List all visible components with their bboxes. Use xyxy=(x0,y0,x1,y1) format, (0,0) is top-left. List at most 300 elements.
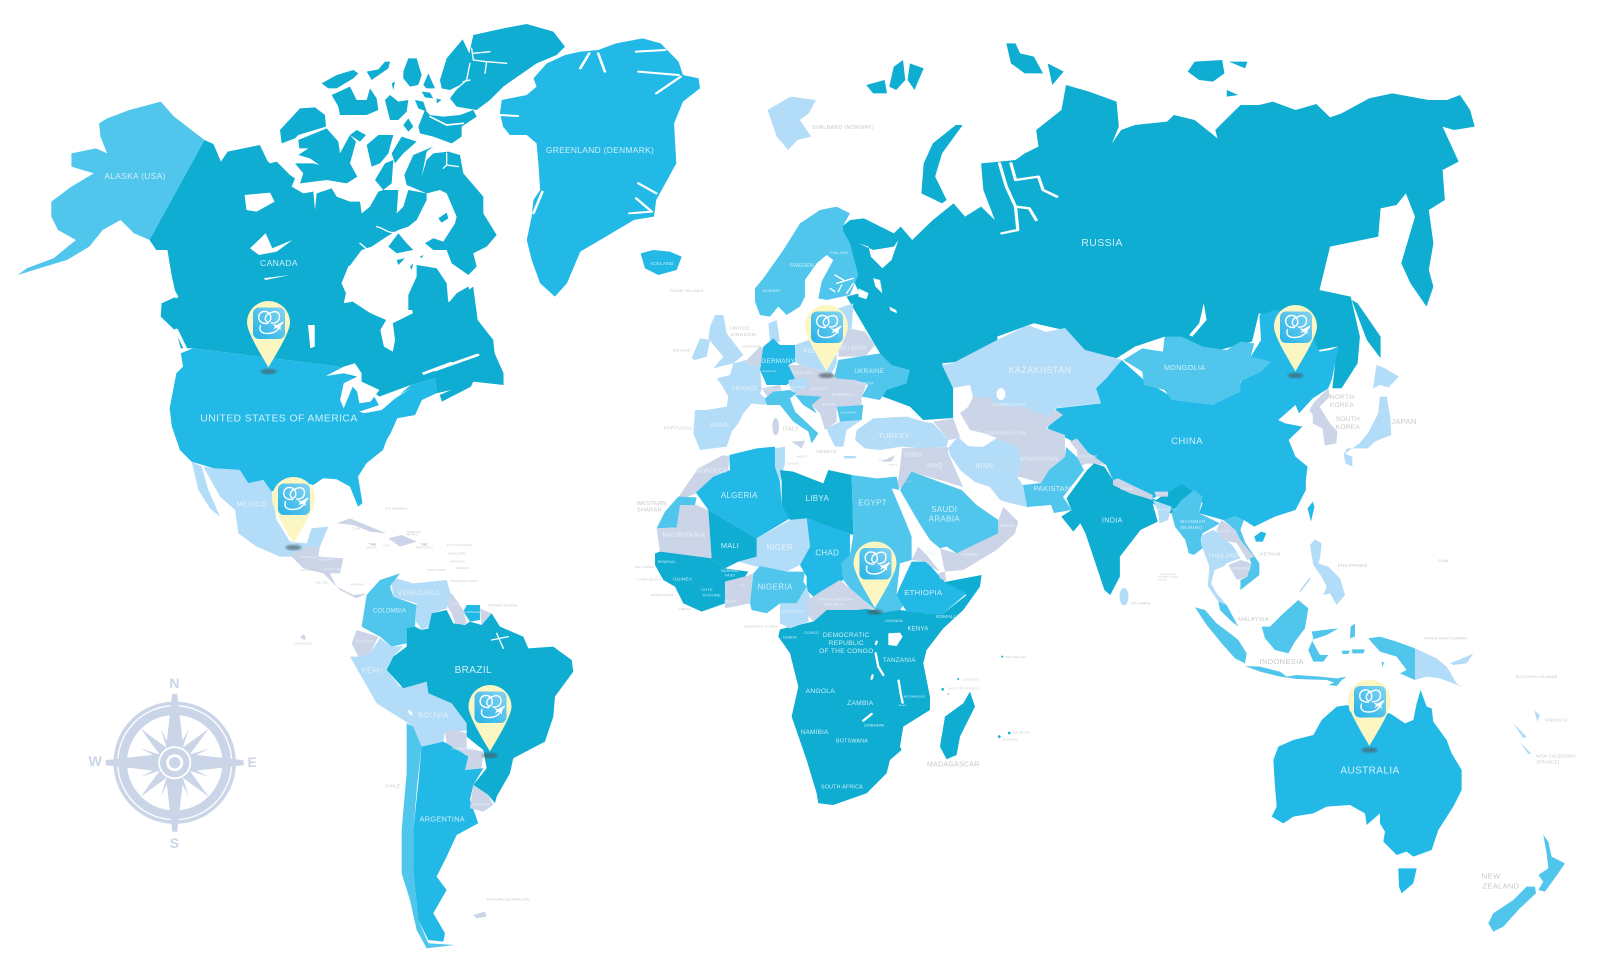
region: Africa and Arabia xyxy=(655,447,1018,805)
labels: North America, Russia, Oceania xyxy=(104,125,1576,890)
labels: Europe and Middle East: IRAN xyxy=(975,463,993,470)
region: Central Asia and Middle East north xyxy=(897,325,1122,513)
labels: Europe and Middle East: HUNGARY xyxy=(811,387,829,391)
Iran xyxy=(948,437,1027,507)
Paraguay xyxy=(445,729,483,770)
labels: Latin America: PUERTO RICO xyxy=(416,547,433,549)
region: Maritime Southeast Asia xyxy=(1195,539,1527,738)
Philippines xyxy=(1310,539,1345,605)
compass rose: E xyxy=(248,754,257,770)
labels: Africa: D'IVOIRE xyxy=(702,592,721,597)
labels: Africa: OMAN xyxy=(1000,523,1015,528)
pin: Brazil xyxy=(468,685,512,758)
Niger xyxy=(738,518,810,572)
Quebec north xyxy=(408,265,477,310)
Baffin Island xyxy=(404,147,497,275)
labels: North America, Russia, Oceania: NEW CALEDONIA xyxy=(1536,754,1576,758)
labels: Africa: ANGOLA xyxy=(806,688,835,695)
labels: Latin America: GUADELOUPE xyxy=(448,552,466,555)
labels: Latin America: VENEZUELA xyxy=(398,590,440,597)
labels: Asia: AFGHANISTAN xyxy=(1020,456,1058,462)
West Africa xyxy=(655,552,748,612)
Galapagos xyxy=(301,634,306,639)
Tunisia xyxy=(775,447,785,482)
Spencer Gulf xyxy=(1367,813,1385,833)
labels: North America, Russia, Oceania: UNITED STATES OF AMERICA xyxy=(200,414,358,424)
Canada north mainland xyxy=(237,153,427,310)
labels: Africa: SENEGAL xyxy=(658,560,676,564)
labels: Latin America: PARAGUAY xyxy=(452,746,475,751)
labels: Africa: UGANDA xyxy=(885,618,903,623)
French Guiana xyxy=(480,608,492,625)
labels: Latin America: ST KITTS AND NEVIS xyxy=(447,544,472,547)
labels: Europe and Middle East: FINLAND xyxy=(830,250,848,255)
labels: Asia: SOUTH xyxy=(1336,416,1360,423)
Sri Lanka xyxy=(1120,588,1128,605)
labels: Europe and Middle East: MOLDOVA xyxy=(856,382,874,386)
labels: Africa: NIGER xyxy=(766,543,793,552)
pin: Australia xyxy=(1348,680,1391,753)
labels: Asia: KASHMIR xyxy=(1079,455,1097,459)
Central and Balkan Europe xyxy=(788,365,867,430)
labels: Africa: NIGERIA xyxy=(757,582,793,591)
White Sea and Russian lakes xyxy=(858,163,1207,337)
labels: Asia: PAPUA NEW GUINEA xyxy=(1423,636,1467,640)
labels: Europe and Middle East: BULGARIA xyxy=(841,411,857,415)
Germany xyxy=(760,338,797,385)
labels: Latin America: COLOMBIA xyxy=(373,609,406,615)
labels: Africa: DEMOCRATIC xyxy=(823,632,870,639)
Baltic states xyxy=(833,303,853,333)
Nigeria xyxy=(750,566,807,613)
Malay isthmus xyxy=(1208,585,1227,605)
region: Central and Southern Europe xyxy=(692,303,960,462)
labels: Europe and Middle East: SYRIA xyxy=(904,453,923,459)
region: Quebec and Hudson islands xyxy=(388,233,477,310)
labels: North America, Russia, Oceania: AUSTRALIA xyxy=(1340,766,1400,776)
labels: Europe and Middle East: POLAND xyxy=(804,349,830,355)
Peru and Bolivia xyxy=(350,638,467,747)
labels: Africa: KENYA xyxy=(907,627,928,633)
labels: North America, Russia, Oceania: CANADA xyxy=(260,258,298,268)
India xyxy=(1061,463,1194,595)
labels: Africa: ZAMBIA xyxy=(847,700,874,707)
labels: Europe and Middle East: UZBEKISTAN xyxy=(993,402,1026,408)
labels: Africa: MALAWI xyxy=(899,704,907,707)
labels: Africa: REUNION xyxy=(1003,738,1017,742)
labels: Latin America: EL SALVADOR xyxy=(301,569,318,572)
labels: Europe and Middle East: MALTA xyxy=(797,454,807,458)
compass rose: S xyxy=(170,835,180,851)
Hudson Bay xyxy=(341,243,420,352)
Hainan xyxy=(1254,532,1266,542)
Franz Josef Land xyxy=(866,60,924,93)
pin: Mexico xyxy=(272,477,315,550)
labels: Asia: CHINA xyxy=(1171,436,1203,447)
labels: Africa: TANZANIA xyxy=(883,657,916,664)
labels: Africa: CHAD xyxy=(815,548,839,557)
labels: Europe and Middle East xyxy=(651,250,1027,483)
labels: Latin America: PANAMA xyxy=(351,583,364,587)
Ellesmere Island xyxy=(440,24,565,110)
labels: Africa: MOROCCO xyxy=(696,469,728,475)
Ghana and Togo xyxy=(725,573,753,608)
Mongolia xyxy=(1123,337,1271,405)
Laos xyxy=(1216,520,1254,560)
Saudi Arabia xyxy=(900,472,998,553)
labels: Europe and Middle East: LEBANON xyxy=(887,464,898,467)
labels: North America, Russia, Oceania: GREENLAND (DENMARK) xyxy=(546,145,654,155)
labels: North America, Russia, Oceania: ZEALAND xyxy=(1483,882,1520,890)
labels: Europe and Middle East: NORWAY xyxy=(762,288,781,293)
labels: Asia: SRI LANKA xyxy=(1131,602,1151,606)
labels: Africa: MOZAMBIQUE xyxy=(904,694,925,698)
labels: Africa: SAUDI xyxy=(931,505,957,514)
France xyxy=(717,360,767,413)
Iceland xyxy=(641,250,682,275)
Taiwan xyxy=(1308,502,1314,522)
labels: Europe and Middle East: CYPRUS xyxy=(879,461,889,463)
labels: Europe and Middle East: TURKEY xyxy=(878,431,910,440)
labels: Europe and Middle East: IRELAND xyxy=(672,347,691,352)
labels: Latin America: BRAZIL xyxy=(455,665,492,676)
labels: Africa: CENTRAL AFRICAN xyxy=(817,598,853,602)
labels: Europe and Middle East: AUSTRIA xyxy=(790,386,806,390)
labels: Europe and Middle East: GREECE xyxy=(816,449,837,454)
labels: Africa: FASO xyxy=(725,574,735,578)
labels: Africa: DJIBOUTI xyxy=(944,573,959,577)
Moluccas xyxy=(1342,623,1384,667)
region: Hudson Bay, USA, Greenland xyxy=(165,38,700,507)
Japan xyxy=(1343,365,1399,467)
compass rose: N xyxy=(169,675,180,691)
labels: Africa: CONGO xyxy=(804,631,819,635)
Pakistan xyxy=(1023,447,1084,513)
Australia xyxy=(1272,690,1462,857)
labels: Africa: SOUTH AFRICA xyxy=(821,785,863,791)
labels: North America, Russia, Oceania: KAZAKHSTAN xyxy=(1009,365,1071,375)
Bangladesh xyxy=(1153,500,1172,523)
Crete and Cyprus xyxy=(843,455,895,462)
labels: Latin America xyxy=(236,499,530,901)
Indian Ocean islands xyxy=(941,656,1011,738)
labels: Africa: GUINEA-BISSAU xyxy=(636,577,661,581)
labels: Latin America: GUYANA xyxy=(450,603,463,607)
Sulawesi xyxy=(1308,628,1338,662)
labels: Latin America: FRENCH GUIANA xyxy=(488,603,518,607)
labels: Latin America: URUGUAY xyxy=(472,803,490,807)
labels: Europe and Middle East: SWEDEN xyxy=(789,263,814,269)
labels: Africa: ARABIA xyxy=(929,514,960,523)
Southampton and small islands xyxy=(388,233,423,270)
labels: Asia: NICOBAR ISLANDS xyxy=(1158,576,1179,579)
labels: Africa: LIBYA xyxy=(805,494,829,503)
labels: Africa: YEMEN xyxy=(961,552,978,557)
Morocco xyxy=(678,455,729,497)
labels: North America, Russia, Oceania: SVALBARD (NORWAY) xyxy=(812,125,874,131)
labels: Asia: MALAYSIA xyxy=(1238,617,1269,623)
pin: South Sudan xyxy=(854,542,896,615)
labels: Europe and Middle East: SPAIN xyxy=(710,423,729,429)
labels: Europe and Middle East: TUNISIA xyxy=(786,461,799,465)
labels: Europe and Middle East: UKRAINE xyxy=(854,368,884,375)
Newfoundland xyxy=(473,353,504,383)
region: Northern Europe xyxy=(641,207,858,317)
labels: Europe and Middle East: TURKMENISTAN xyxy=(985,430,1027,436)
Central African Republic xyxy=(807,580,873,622)
Ukraine xyxy=(833,353,910,400)
Libya xyxy=(780,470,853,535)
labels: Africa: SHARAH xyxy=(637,508,662,514)
labels: Africa: BOTSWANA xyxy=(836,739,868,745)
labels: Europe and Middle East: JORDAN xyxy=(901,479,912,483)
Timor xyxy=(1328,678,1343,686)
labels: Asia: SOLOMON ISLANDS xyxy=(1515,674,1558,679)
New Zealand xyxy=(1488,835,1565,932)
Kashmir xyxy=(1070,438,1106,467)
Sicily and Sardinia xyxy=(772,418,805,448)
Mali xyxy=(708,510,757,568)
labels: Africa: WESTERN xyxy=(637,501,667,507)
New Britain xyxy=(1450,653,1473,665)
Malay Peninsula xyxy=(1218,602,1238,627)
Caucasus xyxy=(933,418,960,440)
Sumatra xyxy=(1195,607,1247,663)
Greenland xyxy=(500,38,700,297)
labels: Latin America: SAN JOSE xyxy=(316,582,328,585)
labels: Latin America: BOLIVIA xyxy=(418,710,449,719)
labels: Latin America: BARBADOS xyxy=(456,567,470,570)
labels: Asia: VIETNAM xyxy=(1259,552,1280,556)
labels: Africa: NAMIBIA xyxy=(801,729,829,736)
pin: Canada xyxy=(247,301,290,374)
labels: Asia: INDIA xyxy=(1102,516,1123,524)
labels: Latin America: JAMAICA xyxy=(366,546,377,549)
Greenland fjords xyxy=(500,50,681,213)
labels: Latin America: HONDURAS xyxy=(319,557,335,561)
Brazil xyxy=(387,610,573,803)
region: Alaska and Canada south, USA, Greenland xyxy=(18,102,504,402)
labels: Latin America: THE BAHAMAS xyxy=(385,506,407,510)
Bhutan xyxy=(1154,492,1168,497)
Guyana xyxy=(447,593,467,627)
Devon fjord xyxy=(430,117,463,125)
labels: Africa: MADAGASCAR xyxy=(927,761,980,768)
Baffin fjord xyxy=(360,153,458,252)
Solomon Islands xyxy=(1513,723,1527,738)
labels: Latin America: TRINIDAD AND TOBAGO xyxy=(450,580,478,583)
Djibouti xyxy=(938,572,947,582)
labels: Asia: (BURMA) xyxy=(1180,525,1202,531)
labels: Europe and Middle East: ITALY xyxy=(783,426,799,432)
Myanmar xyxy=(1172,490,1220,555)
Cameroon xyxy=(780,587,810,628)
labels: Europe and Middle East: CZECH REP. xyxy=(793,371,814,375)
labels: Africa: CAMEROON xyxy=(780,610,803,614)
labels: Asia: LAOS xyxy=(1217,529,1231,534)
labels: Africa: SOMALIA xyxy=(936,614,960,620)
Benelux xyxy=(745,347,765,367)
Turkey xyxy=(855,417,948,450)
Scandinavia and Finland xyxy=(755,207,858,317)
labels: Europe and Middle East: SERBIA xyxy=(822,403,836,407)
Algeria xyxy=(696,447,790,538)
Victoria Island xyxy=(295,128,357,183)
labels: Europe and Middle East: FAROE ISLANDS xyxy=(670,288,704,293)
labels: Asia: INDONESIA xyxy=(1260,657,1304,666)
labels: Asia: MYANMAR xyxy=(1180,519,1206,525)
Central Asia xyxy=(960,397,1065,483)
United States xyxy=(170,348,437,507)
Canada mainland xyxy=(150,140,504,402)
labels: Asia: PHILIPPINES xyxy=(1338,563,1367,568)
Indonesian Papua xyxy=(1368,637,1415,680)
labels: Europe and Middle East: NETHERLANDS xyxy=(742,346,761,349)
Canadian lakes and channels xyxy=(165,193,478,373)
Devon Island xyxy=(418,110,477,143)
Chad xyxy=(800,518,850,597)
labels: Africa: SIERRA LEONE xyxy=(650,593,674,597)
labels: Asia: CAMBODIA xyxy=(1229,567,1251,571)
labels: Europe and Middle East: GERMANY xyxy=(761,358,796,365)
labels: Latin America: MEXICO xyxy=(236,499,267,508)
labels: Latin America: GALAPAGOS xyxy=(295,641,312,645)
labels: Asia: KOREA xyxy=(1336,424,1360,431)
labels: Africa: ERITREA xyxy=(923,551,937,555)
labels: Europe and Middle East: PORTUGAL xyxy=(664,425,692,431)
labels: Africa: ALGERIA xyxy=(721,491,758,500)
labels: Latin America: GUATEMALA xyxy=(300,555,317,559)
labels: Africa: GABON xyxy=(783,636,797,640)
Suriname xyxy=(463,605,480,622)
Austria xyxy=(788,377,808,392)
Palawan xyxy=(1300,578,1310,592)
labels: Africa: MALI xyxy=(721,541,739,550)
African lakes xyxy=(863,633,903,721)
Baja California xyxy=(192,462,220,517)
Madagascar xyxy=(940,692,975,759)
labels: Asia: MONGOLIA xyxy=(1164,364,1205,372)
Big southern Africa group xyxy=(778,575,982,805)
compass rose xyxy=(89,675,257,851)
Uruguay xyxy=(470,785,493,812)
labels: Asia xyxy=(1020,364,1558,679)
Italy xyxy=(765,390,818,443)
Iraq, Syria, Jordan xyxy=(897,447,963,490)
region: Oceania xyxy=(1272,690,1565,932)
labels: Africa: THE GAMBIA xyxy=(634,565,654,569)
labels: Asia: PAKISTAN xyxy=(1034,485,1071,493)
Greece xyxy=(827,420,862,447)
Croatia xyxy=(795,395,822,413)
Java and Lesser Sunda xyxy=(1245,666,1347,683)
Colombia xyxy=(362,573,417,647)
labels: Africa: COMOROS xyxy=(962,677,979,681)
Lake Titicaca xyxy=(407,709,413,716)
Bulgaria xyxy=(837,405,863,422)
labels: North America, Russia, Oceania: VANUATU xyxy=(1545,718,1567,722)
New Siberian Islands xyxy=(1188,60,1247,97)
labels: Asia: (INDIA) xyxy=(1158,578,1166,581)
labels: Europe and Middle East: KINGDOM xyxy=(731,332,756,338)
Thailand xyxy=(1201,530,1240,590)
labels: Africa: MAURITIUS xyxy=(1013,730,1030,734)
labels: Latin America: ARGENTINA xyxy=(420,814,465,823)
labels: North America, Russia, Oceania: RUSSIA xyxy=(1081,237,1123,249)
labels: North America, Russia, Oceania: NEW xyxy=(1482,872,1501,880)
Banks Island xyxy=(280,107,326,143)
labels: Africa: LIBERIA xyxy=(679,607,691,611)
region: Russia and Arctic Asia xyxy=(768,43,1475,420)
Aral Sea xyxy=(996,388,1006,400)
region: East Asia xyxy=(1048,310,1399,605)
Amazon delta xyxy=(492,633,508,648)
Ellesmere fjords xyxy=(453,48,507,92)
labels: Asia: NEPAL xyxy=(1120,487,1133,491)
Venezuela xyxy=(392,578,452,630)
labels: Europe and Middle East: LUXEMBOURG xyxy=(762,371,777,373)
labels: North America, Russia, Oceania: ALASKA (USA) xyxy=(104,171,166,181)
labels: Latin America: REPUBLIC xyxy=(406,534,419,536)
Eritrea xyxy=(912,547,940,572)
Ecuador xyxy=(352,630,378,657)
Finnish lakes xyxy=(830,275,853,293)
Mexico xyxy=(203,467,328,557)
Vietnam xyxy=(1223,516,1259,590)
labels: Latin America: CHILE xyxy=(385,784,401,790)
labels: Africa: ZIMBABWE xyxy=(864,723,885,727)
Belarus xyxy=(838,328,875,357)
labels: Europe and Middle East: FRANCE xyxy=(732,387,758,393)
Papua New Guinea xyxy=(1415,648,1462,687)
Egypt and Sudan xyxy=(842,475,912,613)
Svalbard xyxy=(768,97,816,150)
labels: Africa: ETHIOPIA xyxy=(904,588,943,597)
Tasmania xyxy=(1398,868,1417,893)
labels: Latin America: NICARAGUA xyxy=(324,567,341,571)
labels: Latin America: FALKLAND ISLANDS (UK) xyxy=(487,897,530,901)
labels: Africa: MAYOTTE (FRANCE) xyxy=(948,687,980,691)
Ethiopia xyxy=(897,562,967,613)
Queen Elizabeth islands xyxy=(322,58,442,190)
labels: North America, Russia, Oceania: (FRANCE) xyxy=(1537,760,1560,764)
Caribbean islands xyxy=(337,518,428,547)
labels: Africa: TOGO xyxy=(739,584,745,586)
Ireland xyxy=(692,338,710,360)
Argentina xyxy=(413,742,483,942)
Severnaya Zemlya xyxy=(1006,43,1064,85)
labels: Europe and Middle East: ICELAND xyxy=(651,261,674,267)
labels: Latin America: ECUADOR xyxy=(356,639,374,643)
Spain and Portugal xyxy=(693,407,743,450)
Prince Charles Island xyxy=(438,213,448,223)
labels: Europe and Middle East: SWITZERLAND xyxy=(763,389,781,392)
region: Canadian Arctic xyxy=(237,24,565,310)
labels: Africa: GUINEA xyxy=(673,576,693,581)
China xyxy=(1048,310,1339,527)
labels: Africa: REPUBLIC xyxy=(824,602,844,606)
Chile xyxy=(402,723,455,948)
labels: Europe and Middle East: IRAQ xyxy=(927,464,943,470)
Borneo xyxy=(1262,600,1308,653)
labels: Europe and Middle East: ROMANIA xyxy=(832,392,856,397)
Kazakhstan xyxy=(942,325,1122,417)
Western Sahara xyxy=(657,497,697,528)
Denmark xyxy=(768,320,780,342)
Great Lakes xyxy=(326,363,411,413)
labels: Africa xyxy=(634,469,1030,791)
labels: Latin America: DOMINICAN xyxy=(406,531,421,534)
